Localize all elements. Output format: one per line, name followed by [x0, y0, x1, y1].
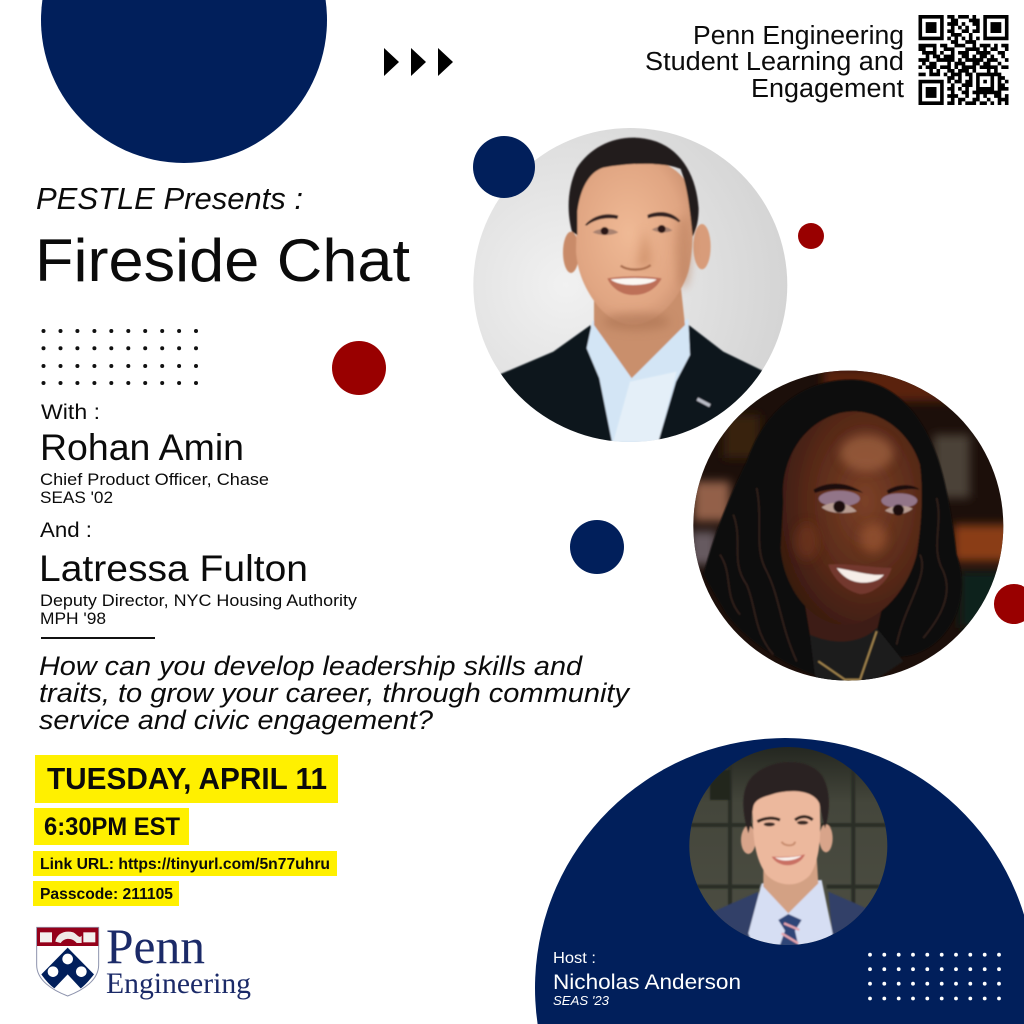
portrait: Latressa Fulton	[690, 368, 1013, 688]
speaker block: Latressa Fulton: Latressa Fulton	[39, 548, 308, 589]
eyes	[764, 822, 775, 826]
speaker block: Rohan Amin: Rohan Amin	[40, 427, 244, 468]
speaker block: Rohan Amin: Chief Product Officer, Chase	[40, 471, 269, 489]
organisation name: Penn Engineering	[693, 22, 904, 50]
brows	[813, 484, 863, 493]
pin	[697, 399, 710, 406]
decorative red circle, right edge	[994, 584, 1024, 624]
panel: host circle	[535, 738, 1024, 1024]
brows	[585, 214, 618, 226]
discussion question: service and civic engagement?	[39, 705, 433, 735]
date highlight	[35, 755, 338, 803]
mouth	[607, 276, 662, 295]
hair	[743, 762, 829, 833]
link highlight: Link URL: https://tinyurl.com/5n77uhru	[40, 856, 330, 873]
hair mass	[703, 380, 962, 678]
portrait: Rohan Amin	[470, 125, 790, 445]
host label: Host :	[553, 950, 596, 967]
speaker block: Latressa Fulton: And :	[40, 518, 92, 542]
time highlight	[34, 808, 189, 845]
face	[781, 411, 922, 625]
portrait: Nicholas Anderson	[689, 747, 888, 945]
time highlight: 6:30PM EST	[44, 813, 180, 841]
shirt	[748, 880, 833, 950]
host label: SEAS '23	[553, 993, 610, 1008]
shirt	[587, 318, 690, 445]
jacket	[714, 892, 866, 938]
brows	[757, 817, 813, 822]
nose shadow	[782, 842, 795, 845]
jacket	[500, 323, 763, 445]
decorative red circle, left	[332, 341, 386, 395]
eyeshadow	[819, 491, 860, 507]
speaker block: Rohan Amin: With :	[41, 400, 100, 424]
locs highlights	[720, 488, 947, 661]
icon: Penn shield	[37, 927, 99, 996]
discussion question: traits, to grow your career, through community	[39, 678, 631, 708]
decorative red circle, top right	[798, 223, 824, 249]
discussion question	[39, 651, 631, 735]
speaker block: Rohan Amin	[40, 400, 269, 507]
ears	[563, 232, 579, 273]
link highlight	[33, 851, 337, 876]
neck	[763, 857, 818, 913]
organisation name	[645, 22, 904, 103]
face	[752, 780, 820, 884]
Penn Engineering logo: Engineering	[106, 967, 251, 1000]
decorative navy circle overlapping portrait	[473, 136, 535, 198]
organisation name: Engagement	[751, 75, 904, 103]
host label: Nicholas Anderson	[553, 971, 741, 994]
face	[576, 158, 693, 325]
neck	[804, 606, 882, 642]
eyes	[822, 503, 857, 513]
nose underside	[621, 265, 651, 270]
white dot grid	[868, 953, 1001, 1000]
decorative navy circle, top left	[41, 0, 327, 163]
title: Fireside Chat: Fireside Chat	[35, 227, 410, 294]
Penn Engineering logo	[37, 918, 251, 1000]
kicker: PESTLE Presents: PESTLE Presents :	[36, 181, 303, 216]
mouth	[828, 564, 892, 594]
passcode highlight	[33, 881, 179, 906]
date highlight: TUESDAY, APRIL 11	[47, 761, 327, 796]
speaker block: Latressa Fulton: MPH '98	[40, 610, 106, 628]
organisation name: Student Learning and	[645, 48, 904, 76]
hair	[569, 138, 699, 237]
tie	[778, 914, 802, 950]
Penn Engineering logo: Penn	[106, 918, 205, 974]
ears	[741, 826, 756, 854]
host label	[553, 950, 741, 1008]
QR code	[918, 17, 1008, 103]
eyes	[593, 229, 618, 235]
black dot grid	[42, 329, 198, 385]
passcode highlight: Passcode: 211105	[40, 886, 173, 903]
decorative navy circle, centre	[570, 520, 624, 574]
mouth	[772, 854, 805, 865]
necklace	[818, 631, 877, 680]
nose and chin shading	[603, 215, 691, 330]
speaker block: Latressa Fulton	[39, 518, 358, 628]
neck	[594, 285, 685, 378]
face highlights	[795, 435, 893, 560]
arrows: three black triangles	[384, 48, 453, 76]
speaker block: Rohan Amin: SEAS '02	[40, 489, 113, 507]
discussion question: How can you develop leadership skills and	[39, 651, 583, 681]
speaker block: Latressa Fulton: Deputy Director, NYC Housing Authority	[40, 592, 358, 610]
top	[810, 628, 902, 681]
